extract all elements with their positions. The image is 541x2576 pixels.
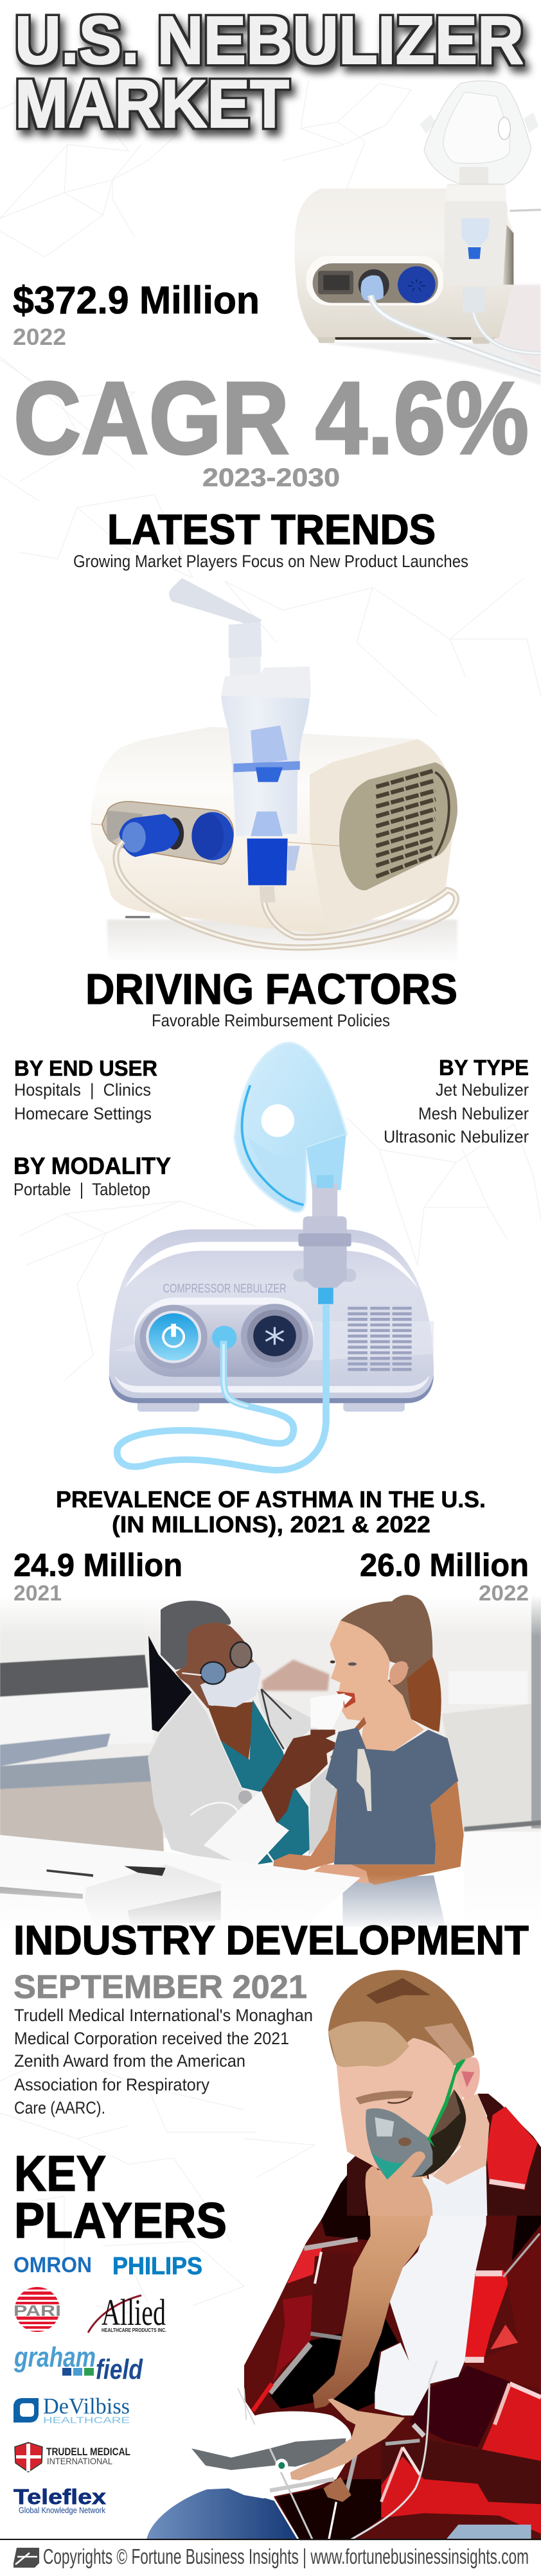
title: U.S. NEBULIZER xyxy=(15,3,524,78)
segment: by modality: BY MODALITY xyxy=(13,1153,171,1179)
segment: by end user xyxy=(14,1056,157,1123)
heading: industry development: INDUSTRY DEVELOPMENT xyxy=(13,1917,529,1963)
logo: allied: HEALTHCARE PRODUCTS INC. xyxy=(102,2327,166,2333)
table and nebulizer xyxy=(0,1835,541,1933)
logo: graham field: field xyxy=(96,2354,143,2385)
market size value: $372.9 Million xyxy=(13,279,260,322)
segment: by end user: Hospitals | Clinics xyxy=(14,1080,151,1100)
title: MARKET xyxy=(15,66,289,142)
heading: key players: PLAYERS xyxy=(14,2192,227,2248)
statistics: asthma prevalence: 26.0 Million xyxy=(360,1547,529,1583)
nebulizer photo (trends) xyxy=(91,578,457,963)
mask xyxy=(235,1042,347,1217)
heading: prevalence of asthma xyxy=(56,1486,486,1538)
development text xyxy=(14,2006,313,2117)
heading: prevalence of asthma: PREVALENCE OF ASTHMA IN THE U.S. xyxy=(56,1486,486,1512)
development text: Medical Corporation received the 2021 xyxy=(14,2029,289,2048)
CAGR: 2023-2030 xyxy=(202,464,340,492)
statistics: asthma prevalence xyxy=(13,1547,529,1606)
compressor nebulizer illustration xyxy=(109,1042,434,1470)
logo: devilbiss: HEALTHCARE xyxy=(43,2415,130,2425)
logo: teleflex: Teleflex xyxy=(13,2485,107,2509)
logo: pari: PARI xyxy=(13,2302,61,2320)
statistics: asthma prevalence: 24.9 Million xyxy=(13,1547,182,1583)
photo: doctor and child xyxy=(0,1581,541,1933)
doctor xyxy=(148,1600,339,1893)
development text: Zenith Award from the American xyxy=(14,2051,245,2071)
statistics: asthma prevalence: 2021 xyxy=(13,1581,62,1606)
logo: allied: Allied xyxy=(102,2291,166,2333)
head and oxygen mask xyxy=(328,1970,541,2216)
heading: latest trends: LATEST TRENDS xyxy=(107,505,436,553)
photo: man with mask and blanket xyxy=(146,1970,541,2540)
logo: trudell medical: TRUDELL MEDICAL xyxy=(46,2446,130,2458)
base unit: COMPRESSOR NEBULIZER xyxy=(163,1282,287,1296)
development text: Association for Respiratory xyxy=(14,2075,209,2094)
segment: by end user: Homecare Settings xyxy=(14,1104,152,1123)
heading: key players: KEY xyxy=(14,2145,106,2202)
segment: by type: Mesh Nebulizer xyxy=(418,1104,529,1123)
development text: Trudell Medical International's Monaghan xyxy=(14,2006,313,2025)
market size value xyxy=(13,279,260,350)
child xyxy=(273,1595,464,1927)
segment: by type: Ultrasonic Nebulizer xyxy=(384,1127,529,1146)
logo: graham field xyxy=(13,2342,143,2385)
segment: by type: Jet Nebulizer xyxy=(436,1080,529,1100)
logo: allied xyxy=(88,2291,166,2333)
segment: by type: BY TYPE xyxy=(439,1056,529,1080)
logo: teleflex: Global Knowledge Network xyxy=(19,2505,105,2515)
segment: by modality xyxy=(13,1153,171,1199)
statistics: asthma prevalence: 2022 xyxy=(479,1581,529,1606)
logo: trudell medical xyxy=(15,2442,130,2472)
base unit xyxy=(109,1216,434,1412)
heading: driving factors: Favorable Reimbursement Policies xyxy=(152,1011,390,1030)
heading: industry development: SEPTEMBER 2021 xyxy=(13,1968,307,2005)
nebulizer photo with mask (top) xyxy=(294,81,541,385)
logo: trudell medical: INTERNATIONAL xyxy=(47,2456,112,2466)
heading: latest trends: Growing Market Players Focus on New Product Launches xyxy=(73,552,468,571)
logo: teleflex xyxy=(13,2485,107,2515)
segment: by end user: BY END USER xyxy=(14,1056,157,1081)
grille xyxy=(348,1307,412,1371)
tubing xyxy=(117,1305,326,1470)
icon: company logo xyxy=(13,2548,39,2568)
heading: driving factors: DRIVING FACTORS xyxy=(85,965,457,1013)
footer rule xyxy=(0,2539,541,2540)
development text: Care (AARC). xyxy=(14,2098,105,2117)
title xyxy=(15,3,524,142)
logo: philips: PHILIPS xyxy=(112,2253,202,2280)
heading: key players xyxy=(14,2145,227,2248)
logo: devilbiss: DeVilbiss xyxy=(43,2394,130,2419)
heading: industry development xyxy=(13,1917,529,2005)
segment: by modality: Portable | Tabletop xyxy=(13,1180,150,1199)
logo: omron: OMRON xyxy=(13,2253,92,2277)
heading: latest trends xyxy=(73,505,468,571)
logo: graham field: graham xyxy=(13,2342,96,2373)
heading: prevalence of asthma: (IN MILLIONS), 2021 & 2022 xyxy=(112,1511,430,1538)
logo: pari xyxy=(13,2287,62,2333)
segment: by type xyxy=(384,1056,529,1146)
market size value: 2022 xyxy=(13,324,66,350)
logo: devilbiss xyxy=(13,2394,130,2425)
window background xyxy=(0,1581,541,1933)
blanket, arm, shirt and device xyxy=(146,2108,541,2540)
